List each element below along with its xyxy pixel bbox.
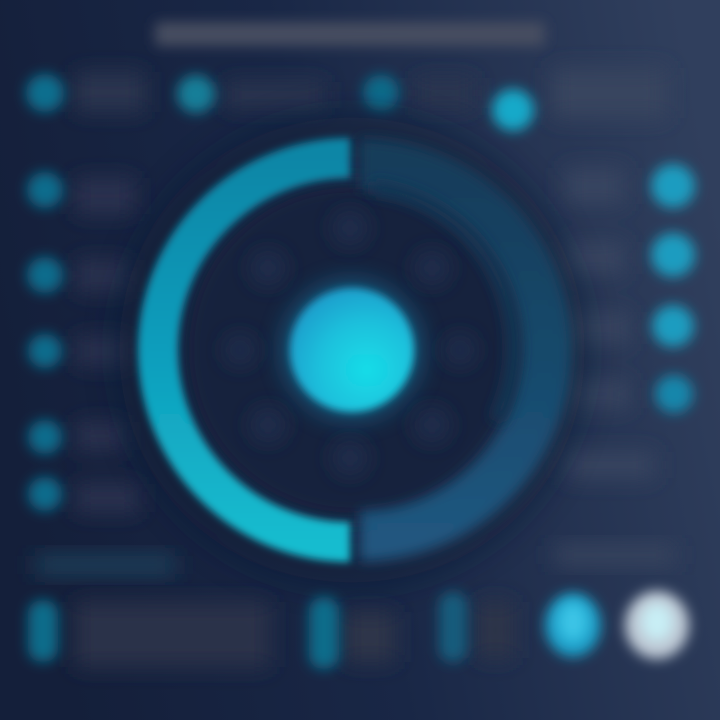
cyan button highlight [558, 602, 588, 642]
donut chart [130, 128, 574, 572]
caption block [75, 602, 270, 667]
cyan button [545, 593, 601, 657]
bottom right heading [555, 545, 675, 565]
central dark disc [182, 180, 522, 520]
inner spokes and nodes [225, 211, 475, 475]
stack one [309, 597, 339, 669]
top captions [75, 68, 667, 118]
top icons [26, 74, 534, 131]
right captions [565, 168, 655, 478]
central circle [280, 278, 424, 422]
title bar [155, 22, 545, 46]
bottom section heading [35, 555, 175, 575]
left captions [75, 178, 140, 512]
top row: icons and captions [26, 68, 667, 131]
core [290, 288, 414, 412]
glow [280, 278, 424, 422]
right column: icons and captions [565, 164, 695, 478]
left icons [27, 172, 63, 511]
captions [345, 602, 513, 662]
stack two [439, 592, 467, 662]
inner right arc [372, 188, 514, 420]
right icons [651, 164, 695, 413]
white button highlight [641, 603, 673, 641]
right arc [360, 164, 546, 536]
left arc [158, 158, 350, 542]
bottom left legend [28, 600, 270, 667]
white button [625, 591, 689, 659]
icon stack [28, 600, 58, 662]
bottom centre legend [309, 592, 513, 669]
left column: icons and captions [27, 172, 140, 512]
dark halo around ring [130, 128, 574, 572]
